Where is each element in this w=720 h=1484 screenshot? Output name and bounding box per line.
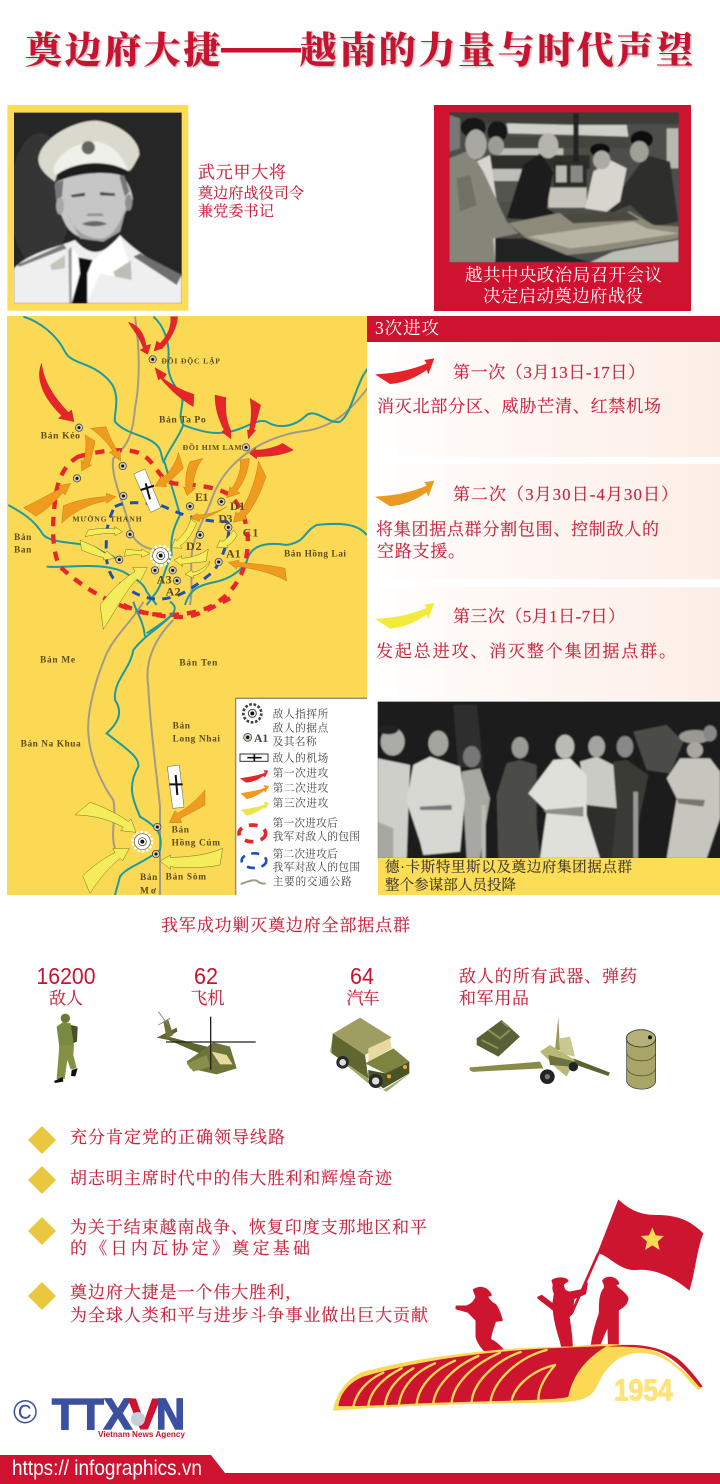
panel: battle map [7,316,370,896]
panel: politburo meeting photo [434,105,691,311]
stat: enemy soldiers: 16200 [36,963,96,989]
commander caption: 奠边府战役司令 [198,185,304,202]
southern place labels: Bản Na Khua [21,740,81,750]
map place labels: Bản Ta Po [159,414,206,425]
item: correct leadership: 充分肯定党的正确领导线路 [70,1128,285,1147]
stat: vehicles: 64 [350,963,374,989]
southern airfield [167,765,184,808]
legend labels: 及其名称 [273,736,317,748]
map place labels: Bản Hồng Lai [284,549,346,560]
meeting caption: 决定启动奠边府战役 [483,286,643,306]
southern command post [133,832,152,851]
surrender caption: 德·卡斯特里斯以及奠边府集团据点群 [385,858,632,876]
attack three: 发起总进攻、消灭整个集团据点群。 [376,642,676,661]
map place labels: E1 [195,490,208,504]
emblem: soldiers with flag on the hill [333,1199,703,1411]
item: correct leadership [28,1126,285,1154]
command post gear [151,546,170,565]
flag [572,1199,703,1313]
southern place labels: Hồng Cúm [172,838,220,849]
surrender image [375,699,720,862]
strongpoints [73,356,250,584]
panel: surrender photo [375,699,720,895]
year: 1954 [614,1374,673,1408]
legend labels: 第二次进攻后 [273,847,338,860]
title: 奠边府大捷——越南的力量与时代声望 [25,20,693,74]
map place labels: ĐỒI HIM LAM [183,442,242,452]
legend labels: 第一次进攻 [273,767,329,780]
stat: vehicles [330,963,410,1092]
legend labels: 第一次进攻后 [273,817,338,830]
stat: weapons and supplies [459,967,656,1089]
soldiers [457,1278,627,1357]
legend labels: 敌人指挥所 [273,707,329,720]
southern place labels: Long Nhai [173,735,220,745]
third attack arrows [80,519,237,629]
stat: vehicles: 汽车 [346,989,380,1008]
map place labels: A2 [166,585,181,599]
second encirclement ring [106,503,229,599]
stat: enemy soldiers: 敌人 [49,989,83,1008]
logo: copyright and TTXVN: Vietnam News Agency [98,1429,185,1439]
legend icons: A1 [254,732,268,745]
southern arrows [75,790,223,893]
map place labels: D1 [230,499,245,513]
stat: aircraft [157,963,256,1074]
map place labels: C1 [243,526,258,540]
commander caption [198,163,304,220]
southern place labels: Bản [172,825,190,835]
legend labels [273,707,360,888]
attack two: 将集团据点群分割包围、控制敌人的 [376,520,659,539]
icon: crates, howitzer and barrel [470,1017,656,1089]
significance list [28,1126,428,1325]
logo: copyright and TTXVN: N [156,1390,185,1439]
attacks header: 3次进攻 [375,318,440,338]
southern place labels: Bản Sòm [166,872,206,882]
legend labels: 第二次进攻 [273,782,329,795]
item: Ho Chi Minh era [28,1166,393,1194]
item: global contribution: 为全球人类和平与进步斗争事业做出巨大贡献 [70,1306,428,1325]
footer bar: https:// infographics.vn [12,1457,202,1480]
results heading: 我军成功剿灭奠边府全部据点群 [161,916,410,935]
legend labels: 我军对敌人的包围 [273,830,360,843]
logo: copyright and TTXVN [13,1390,185,1439]
map place labels: A3 [157,572,172,586]
first attack arrows [39,317,293,459]
meeting caption [465,265,662,306]
logo: copyright and TTXVN: V [128,1390,161,1439]
item: Ho Chi Minh era: 胡志明主席时代中的伟大胜利和辉煌奇迹 [70,1168,393,1188]
footer bar [0,1455,720,1484]
legend labels: 主要的交通公路 [273,875,352,888]
map legend [236,698,369,896]
map place labels [14,355,346,599]
legend icons [239,704,269,884]
legend labels: 敌人的机场 [273,752,329,765]
icon: soldier [54,1014,78,1083]
hill [333,1344,703,1411]
item: global contribution: 奠边府大捷是一个伟大胜利， [70,1283,302,1302]
stat: weapons and supplies: 敌人的所有武器、弹药 [459,967,637,986]
attack three [367,587,720,700]
attack one: 第一次（3月13日-17日） [453,363,645,382]
commander caption: 兼党委书记 [198,202,274,220]
meeting photo [447,110,682,265]
first encirclement ring [53,450,248,615]
southern place labels: Bản Me [40,655,75,665]
item: Geneva agreement [28,1217,427,1258]
item: Geneva agreement: 为关于结束越南战争、恢复印度支那地区和平 [70,1218,427,1237]
logo: copyright and TTXVN: TTX [52,1390,132,1439]
map place labels: Ban [14,545,32,555]
map place labels: Bản [14,533,32,543]
panel: commander portrait [7,105,188,311]
meeting caption: 越共中央政治局召开会议 [465,265,662,285]
southern strongpoints [152,823,161,858]
stat: enemy soldiers [36,963,96,1083]
ring continuation [123,598,230,617]
legend labels: 我军对敌人的包围 [273,861,360,874]
panel: three attacks [367,316,720,700]
commander caption: 武元甲大将 [198,163,286,182]
airfield [134,469,161,512]
southern place labels [21,655,220,896]
surrender caption: 整个参谋部人员投降 [385,876,516,894]
stat: aircraft: 62 [194,963,218,989]
attacks header [367,316,720,342]
item: global contribution [28,1282,428,1325]
southern place labels: Mơ [140,886,157,896]
stat: weapons and supplies: 和军用品 [459,989,529,1008]
map place labels: MƯỜNG THANH [72,514,142,524]
map place labels: D3 [218,511,232,525]
southern place labels: Bản [173,721,191,731]
icon: helicopter [157,1012,256,1074]
attack two: 第二次（3月30日-4月30日） [453,485,678,504]
icon: jeep [330,1018,410,1092]
southern place labels: Bản [140,873,158,883]
map place labels: A1 [226,547,241,561]
attack one [367,343,720,457]
logo: copyright and TTXVN: © [13,1393,37,1430]
map place labels: D2 [186,539,202,553]
attack two [367,464,720,579]
surrender caption [378,858,720,895]
attack two: 空路支援。 [377,542,465,561]
map place labels: ĐỒI ĐỘC LẬP [161,355,220,365]
southern place labels: Bản Ten [179,659,218,669]
map place labels: Bản Kéo [41,431,80,442]
legend labels: 敌人的据点 [273,722,329,735]
map: southern area [21,598,369,896]
stat: aircraft: 飞机 [190,989,224,1008]
attack one: 消灭北部分区、威胁芒清、红禁机场 [377,397,661,416]
attack three: 第三次（5月1日-7日） [453,607,625,626]
legend labels: 第三次进攻 [273,797,329,810]
item: Geneva agreement: 的《日内瓦协定》奠定基础 [70,1239,310,1258]
map: northern area [8,317,370,629]
second attack arrows [23,427,287,581]
